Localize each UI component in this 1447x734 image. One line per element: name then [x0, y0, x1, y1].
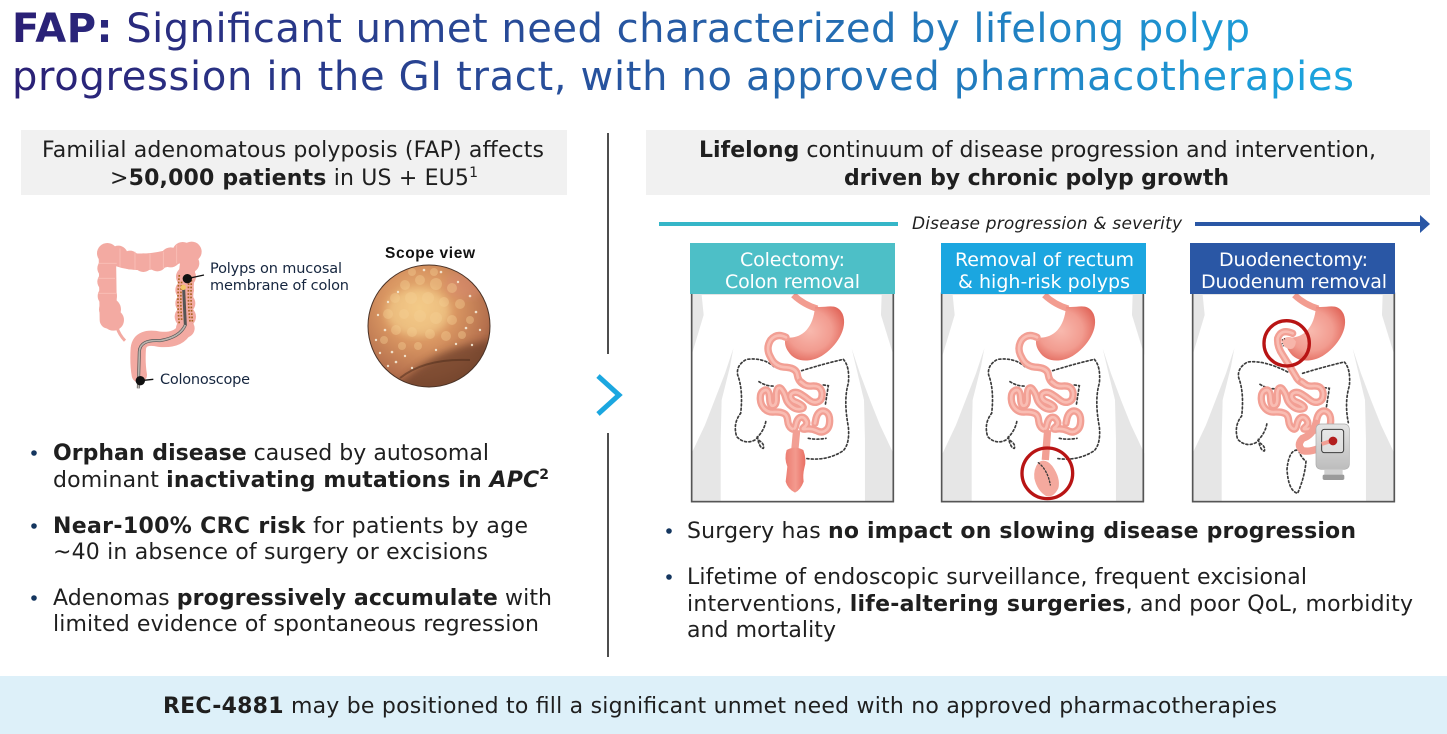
bullet 1 [31, 441, 549, 493]
bullet 2: Lifetime of endoscopic surveillance, frequent excisional [687, 565, 1307, 590]
panel: left header: Familial adenomatous polyposis (FAP) affects [42, 138, 544, 163]
arrow: disease progression: Disease progression & severity [912, 214, 1183, 234]
arrow: disease progression [659, 214, 1430, 234]
bullet 2: interventions, life-altering surgeries, and poor QoL, morbidity [687, 592, 1413, 617]
panel: rectum removal [941, 243, 1146, 502]
panel: duodenectomy [1190, 243, 1395, 502]
bullet 2: Near-100% CRC risk for patients by age [53, 514, 528, 539]
scope view outline [368, 265, 490, 387]
panel: left header: 1 [469, 165, 478, 181]
panel: right header: Lifelong continuum of disease progression and intervention, [699, 138, 1376, 163]
bullet 1: 2 [539, 467, 549, 483]
header: duodenectomy: Duodenum removal [1201, 271, 1387, 293]
panel: left header [21, 130, 567, 195]
divider: vertical line with gap [607, 133, 609, 657]
header: colectomy: Colectomy: [740, 249, 845, 271]
header: colectomy [690, 243, 895, 294]
header: rectum removal: & high-risk polyps [958, 271, 1130, 293]
header: duodenectomy [1190, 243, 1395, 294]
bullet 1: Surgery has no impact on slowing disease progression [687, 519, 1356, 544]
banner: conclusion [0, 676, 1447, 734]
label: polyps: Polyps on mucosal [210, 261, 342, 277]
icon: chevron arrow [598, 376, 619, 414]
label: polyps [210, 261, 349, 294]
bullet 2: and mortality [687, 618, 836, 643]
header: duodenectomy: Duodenectomy: [1219, 249, 1368, 271]
header: rectum removal [941, 243, 1146, 294]
panel: left header: >50,000 patients in US + EU5 [110, 166, 469, 191]
panel: right header [646, 130, 1430, 195]
bullet 3: limited evidence of spontaneous regression [53, 612, 539, 637]
bullet 3: Adenomas progressively accumulate with [53, 586, 552, 611]
label: scope view: Scope view [385, 245, 476, 262]
banner: conclusion: REC-4881 may be positioned to fill a significant unmet need with no approved pharmacotherapies [163, 694, 1277, 719]
bullet 2 [666, 565, 1413, 643]
bullet 1: dominant inactivating mutations in APC [53, 468, 539, 493]
right bullet list [666, 519, 1413, 643]
title: FAP: Significant unmet need characterized by lifelong polyp [12, 6, 1250, 52]
left bullet list [31, 441, 552, 637]
colon illustration [97, 242, 204, 388]
header: colectomy: Colon removal [725, 271, 860, 293]
bullet 1: Orphan disease caused by autosomal [53, 441, 489, 466]
title [12, 6, 1354, 100]
title: progression in the GI tract, with no approved pharmacotherapies [12, 54, 1354, 100]
label: polyps: membrane of colon [210, 278, 349, 294]
scope view photo [368, 266, 490, 386]
panel: right header: driven by chronic polyp growth [844, 166, 1229, 191]
panel: colectomy [690, 243, 895, 502]
bullet 2 [31, 514, 528, 565]
bullet 2: ~40 in absence of surgery or excisions [53, 540, 488, 565]
bullet 3 [31, 586, 552, 637]
label: colonoscope: Colonoscope [160, 372, 250, 388]
header: rectum removal: Removal of rectum [955, 249, 1134, 271]
